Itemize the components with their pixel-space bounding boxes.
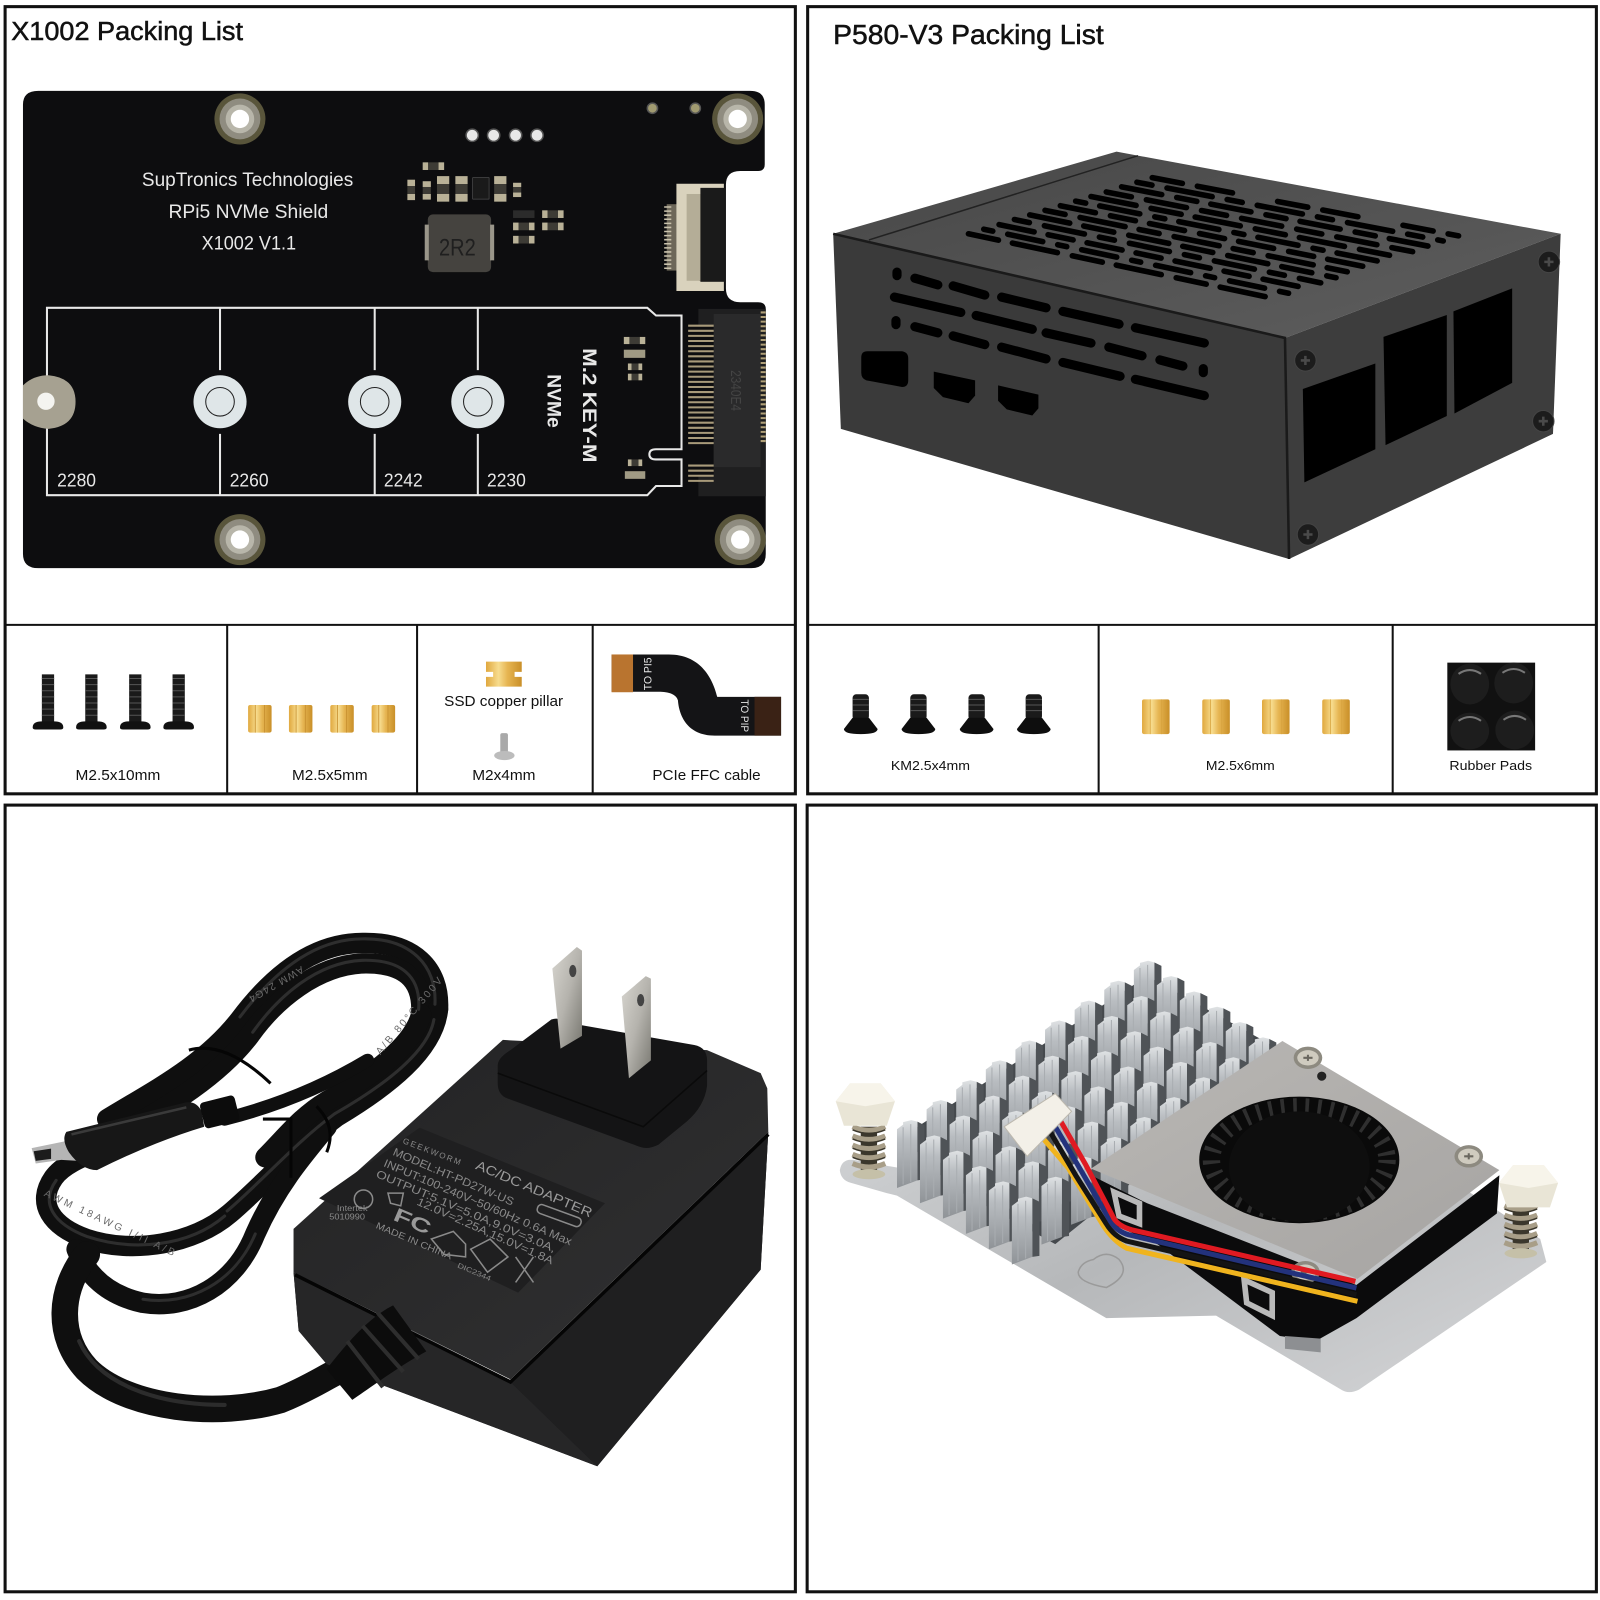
- accessory: M2.5x5mm standoffs: [248, 705, 395, 784]
- rating label: AC/DC ADAPTER: [474, 1158, 595, 1220]
- cable jacket print: A/B 80°C 300V: [374, 976, 445, 1057]
- rating label: 5010990: [329, 1213, 366, 1222]
- heatsink fins: [897, 961, 1290, 1265]
- rating label: Intertek: [337, 1204, 369, 1213]
- front windows: [1303, 288, 1512, 482]
- accessory: M2.5x10mm screws: M2.5x10mm: [76, 768, 160, 784]
- accessory: SSD copper pillar and M2x4mm screw: M2x4mm: [472, 768, 536, 784]
- silkscreen text: [57, 169, 600, 491]
- accessory: PCIe FFC cable: TO PIP: [738, 699, 750, 732]
- accessory: M2.5x6mm standoffs: M2.5x6mm: [1206, 758, 1275, 773]
- label symbols: [354, 1190, 582, 1282]
- accessory: SSD copper pillar and M2x4mm screw: [444, 662, 563, 784]
- fan connector: [1004, 1094, 1072, 1156]
- fan top plate: [1091, 1041, 1499, 1279]
- silkscreen text: NVMe: [542, 374, 564, 428]
- panel frame: [5, 805, 795, 1592]
- accessory: M2.5x6mm standoffs: [1142, 699, 1350, 773]
- accessory: KM2.5x4mm screws: [844, 694, 1051, 773]
- adapter body upper: [294, 1040, 768, 1379]
- adapter body lower: [294, 1132, 768, 1466]
- accessory: PCIe FFC cable: TO PI5: [642, 658, 654, 690]
- product photo: X1002 PCB: [23, 91, 766, 568]
- silkscreen text: 2260: [230, 470, 269, 491]
- right spring post: [1499, 1165, 1558, 1258]
- product photo: metal case: [833, 152, 1561, 559]
- silkscreen text: M.2 KEY-M: [578, 348, 600, 463]
- rating label: INPUT:100-240V~50/60Hz 0.6A Max: [382, 1158, 574, 1248]
- cable jacket print: AWM 24G4: [246, 963, 305, 1004]
- panel: X1002 packing list: [5, 7, 795, 794]
- title: P580-V3 Packing List: [833, 19, 1104, 50]
- product photo: heatsink with blower fan: [836, 961, 1558, 1392]
- fan opening and hub: [1199, 1097, 1399, 1223]
- rating label: MADE IN CHINA: [374, 1220, 454, 1262]
- left spring post: [836, 1083, 895, 1179]
- M.2 socket: [698, 309, 766, 496]
- silkscreen text: 2280: [57, 470, 96, 491]
- silkscreen text: SupTronics Technologies: [142, 169, 353, 191]
- M.2 socket: 2340E4: [727, 370, 743, 411]
- silkscreen text: 2230: [487, 470, 526, 491]
- rating label: GEEKWORM: [402, 1137, 462, 1167]
- USB-C connector: [32, 1095, 240, 1170]
- rating label: [319, 1128, 605, 1293]
- panel frame: [807, 805, 1596, 1592]
- test pads: [466, 103, 700, 141]
- side ports: [861, 351, 1038, 416]
- accessory: SSD copper pillar and M2x4mm screw: SSD copper pillar: [444, 694, 563, 710]
- cable jacket print: AWM 18AWG I/II A/B: [42, 1188, 176, 1259]
- panel: active cooler: [807, 805, 1596, 1592]
- wall plug: [498, 947, 707, 1148]
- FFC connector: [667, 184, 725, 291]
- cable jacket print: [42, 963, 445, 1259]
- silkscreen text: 2242: [384, 470, 423, 491]
- panel: P580-V3 packing list: [808, 7, 1596, 794]
- base plate: [840, 1055, 1546, 1392]
- accessory: rubber pads: Rubber Pads: [1449, 758, 1532, 773]
- coiled cable: [46, 939, 438, 1409]
- rating label: MODEL:HT-PD27W-US: [391, 1147, 515, 1208]
- power inductor: 2R2: [439, 234, 476, 261]
- accessory: M2.5x10mm screws: [33, 674, 194, 784]
- product photo: USB-C power adapter: [32, 939, 768, 1466]
- panel frame: [5, 7, 795, 794]
- case screws: [1295, 251, 1560, 545]
- accessory: PCIe FFC cable: PCIe FFC cable: [652, 768, 761, 784]
- mounting holes: [23, 93, 766, 565]
- M.2 outline: [47, 308, 682, 495]
- title: X1002 Packing List: [11, 18, 243, 46]
- rating label: 12.0V=2.25A,15.0V=1.8A: [415, 1196, 555, 1268]
- rating label: FC: [390, 1204, 434, 1239]
- accessory row dividers: [5, 625, 795, 794]
- side vent slots: [894, 272, 1204, 396]
- fan screws: [1291, 1047, 1483, 1283]
- fan wires: [1044, 1121, 1357, 1301]
- plug prongs: [552, 947, 651, 1078]
- cable ties: [189, 1048, 330, 1178]
- fan body: [1091, 1175, 1499, 1341]
- accessory: rubber pads: [1447, 663, 1535, 773]
- fan brackets: [1114, 1192, 1272, 1316]
- panel: power adapter: [5, 805, 795, 1592]
- strain relief: [327, 1305, 426, 1400]
- accessory: M2.5x5mm standoffs: M2.5x5mm: [292, 768, 368, 784]
- panel frame: [808, 7, 1596, 794]
- rating label: OUTPUT:5.1V=5.0A,9.0V=3.0A,: [374, 1168, 557, 1255]
- accessory: PCIe FFC cable: [612, 654, 781, 784]
- silkscreen text: RPi5 NVMe Shield: [168, 201, 328, 223]
- rating label: DIC2344: [456, 1262, 492, 1283]
- accessory: KM2.5x4mm screws: KM2.5x4mm: [891, 758, 970, 773]
- accessory row dividers: [808, 625, 1596, 794]
- silkscreen text: X1002 V1.1: [202, 233, 296, 255]
- raspberry logo: [1078, 1254, 1123, 1288]
- top vent slots: [968, 178, 1459, 299]
- power inductor: [425, 214, 494, 272]
- small SMD components: [407, 162, 645, 479]
